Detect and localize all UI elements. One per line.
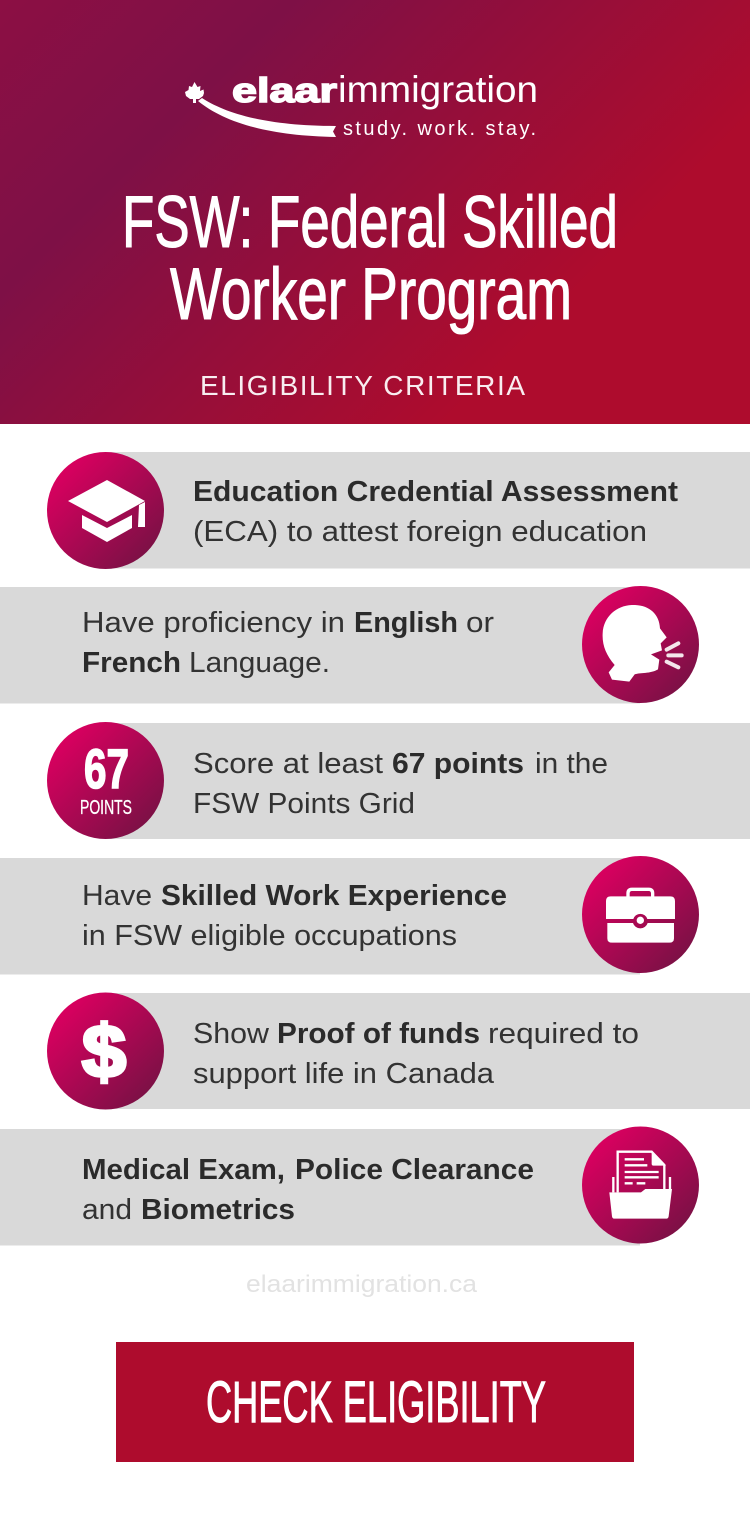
text: English [354,607,458,639]
icon: document folder [582,1126,699,1244]
icon: speaking head [582,586,699,703]
row: education credential assessment [47,452,750,569]
button: check eligibility: CHECK ELIGIBILITY [206,1370,546,1435]
text: 67 points [392,748,524,780]
icon: 67 points badge: 67 [84,737,129,800]
header panel [0,0,750,424]
text [193,1018,639,1090]
text: French [82,647,181,679]
row: medical exam, police clearance, biometrics [0,1126,699,1246]
website url: elaarimmigration.ca [246,1271,477,1298]
logo: elaar [232,72,337,110]
text: Police Clearance [295,1154,534,1186]
text: support life in Canada [193,1058,495,1090]
text: Biometrics [141,1194,295,1226]
icon: 67 points badge [47,722,164,839]
text: (ECA) to attest foreign education [193,516,647,548]
icon: graduation cap [47,452,164,569]
text: required to [488,1018,639,1050]
row: proof of funds [47,992,750,1110]
row: skilled work experience [0,856,699,974]
text [82,880,507,952]
text: or [466,607,494,639]
logo: study. work. stay. [343,118,536,140]
text: Have [82,880,152,912]
text: Language. [189,647,330,679]
title: Worker Program [170,254,572,335]
text: in the [535,748,608,780]
text: Skilled Work Experience [161,880,507,912]
icon: 67 points badge: POINTS [80,797,132,819]
logo [185,69,538,140]
text: in FSW eligible occupations [82,920,457,952]
icon: dollar sign: $ [82,1010,126,1093]
subtitle: ELIGIBILITY CRITERIA [200,370,525,401]
icon: briefcase [582,856,699,973]
text [193,748,608,820]
icon: dollar sign [47,992,164,1110]
text [82,1154,534,1226]
row: language proficiency [0,586,699,704]
button: check eligibility [116,1342,634,1462]
title [122,182,618,335]
text: FSW Points Grid [193,788,415,820]
text: Score at least [193,748,383,780]
row: 67 points [47,722,750,839]
text: Education Credential Assessment [193,476,679,508]
text [193,476,679,548]
text: Show [193,1018,270,1050]
text: Medical Exam, [82,1154,285,1186]
text [82,607,494,679]
logo: immigration [338,69,538,110]
text: and [82,1194,132,1226]
text: Have proficiency in [82,607,345,639]
text: Proof of funds [277,1018,480,1050]
